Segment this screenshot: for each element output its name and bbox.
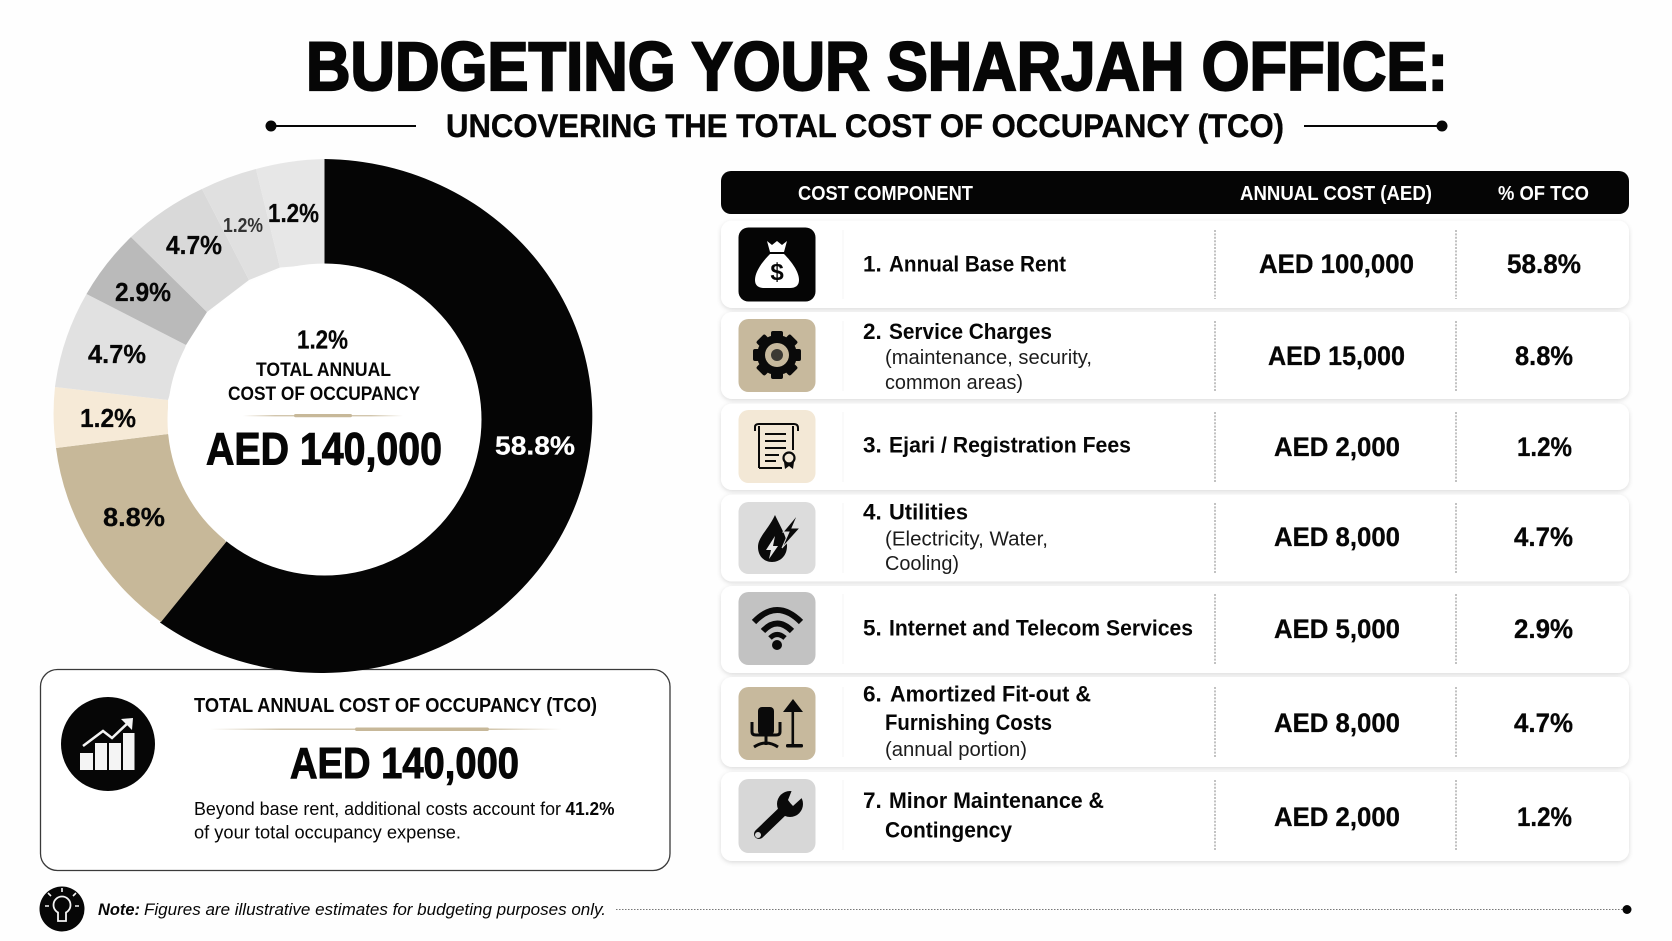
table row 2: service charges: Service Charges bbox=[889, 319, 1052, 344]
icon: wifi bbox=[738, 592, 816, 665]
table row 2: service charges: AED 15,000 bbox=[1268, 341, 1405, 371]
box heading: TOTAL ANNUAL COST OF OCCUPANCY (TCO) bbox=[194, 695, 597, 717]
table row 1: annual base rent: Annual Base Rent bbox=[889, 252, 1066, 276]
panel: TCO summary box bbox=[40, 670, 670, 870]
table row 2: service charges: (maintenance, security, bbox=[885, 346, 1092, 369]
table header bbox=[721, 171, 1629, 214]
donut centre text: AED 140,000 bbox=[206, 424, 442, 474]
table row 5: internet and telecom: AED 5,000 bbox=[1274, 614, 1400, 644]
footnote: Note: bbox=[98, 900, 140, 919]
footnote: Figures are illustrative estimates for budgeting purposes only. bbox=[144, 900, 606, 919]
table row 4: utilities: 4. bbox=[863, 500, 882, 524]
slice labels bbox=[80, 198, 575, 532]
table row 3: ejari registration fees: AED 2,000 bbox=[1274, 432, 1400, 462]
donut centre text: TOTAL ANNUAL bbox=[256, 360, 391, 381]
icon: money bag bbox=[738, 228, 816, 302]
slice labels: 4.7% bbox=[88, 339, 146, 369]
box explanation bbox=[194, 799, 614, 842]
box explanation: of your total occupancy expense. bbox=[194, 822, 461, 842]
table row 2: service charges: 2. bbox=[863, 319, 882, 344]
icon: certificate document bbox=[738, 410, 816, 483]
table row 4: utilities bbox=[721, 494, 1629, 582]
table row 7: minor maintenance: AED 2,000 bbox=[1274, 802, 1400, 832]
table row 4: utilities: (Electricity, Water, bbox=[885, 528, 1048, 550]
table row 3: ejari registration fees: 3. bbox=[863, 432, 882, 458]
table row 3: ejari registration fees bbox=[721, 404, 1629, 490]
slice labels: 1.2% bbox=[268, 198, 319, 228]
icon: wrench bbox=[738, 779, 816, 853]
table row 7: minor maintenance: 7. bbox=[863, 788, 882, 813]
slice labels: 58.8% bbox=[495, 430, 575, 460]
table row 2: service charges: common areas) bbox=[885, 371, 1023, 394]
table row 6: fit-out and furnishing: Furnishing Costs bbox=[885, 710, 1052, 735]
subtitle with rules: UNCOVERING THE TOTAL COST OF OCCUPANCY (TCO) bbox=[446, 108, 1284, 144]
table row 1: annual base rent: 1. bbox=[863, 252, 882, 276]
table row 7: minor maintenance: Minor Maintenance & bbox=[889, 788, 1104, 813]
table row 3: ejari registration fees: Ejari / Registration Fees bbox=[889, 432, 1131, 458]
table row 6: fit-out and furnishing: AED 8,000 bbox=[1274, 708, 1400, 738]
table row 7: minor maintenance: Contingency bbox=[885, 818, 1012, 842]
table row 6: fit-out and furnishing: Amortized Fit-out & bbox=[890, 682, 1091, 706]
donut chart bbox=[54, 159, 592, 673]
table row 7: minor maintenance: 1.2% bbox=[1517, 802, 1572, 832]
donut centre text: 1.2% bbox=[297, 324, 348, 354]
donut centre text: COST OF OCCUPANCY bbox=[228, 384, 420, 405]
title: BUDGETING YOUR SHARJAH OFFICE: bbox=[306, 28, 1448, 105]
table row 4: utilities: 4.7% bbox=[1514, 522, 1573, 552]
icon: office chair and lamp bbox=[738, 687, 816, 760]
slice labels: 4.7% bbox=[166, 230, 222, 260]
table row 1: annual base rent: 58.8% bbox=[1507, 249, 1581, 279]
footnote bbox=[40, 886, 1632, 932]
table row 7: minor maintenance bbox=[721, 772, 1629, 861]
slice labels: 1.2% bbox=[223, 215, 263, 237]
icon: money bag: $ bbox=[770, 259, 784, 286]
table row 6: fit-out and furnishing bbox=[721, 677, 1629, 767]
table row 2: service charges bbox=[721, 312, 1629, 399]
slice labels: 1.2% bbox=[80, 403, 136, 433]
table row 4: utilities: AED 8,000 bbox=[1274, 522, 1400, 552]
slice labels: 2.9% bbox=[115, 277, 171, 307]
table row 4: utilities: Utilities bbox=[889, 500, 968, 524]
table row 5: internet and telecom: 5. bbox=[863, 616, 882, 640]
table row 6: fit-out and furnishing: 4.7% bbox=[1514, 708, 1573, 738]
table row 5: internet and telecom: 2.9% bbox=[1514, 614, 1573, 644]
table header: ANNUAL COST (AED) bbox=[1240, 183, 1432, 205]
table row 5: internet and telecom bbox=[721, 586, 1629, 673]
icon: light bulb bbox=[40, 886, 84, 932]
table row 3: ejari registration fees: 1.2% bbox=[1517, 432, 1572, 462]
table row 2: service charges: 8.8% bbox=[1515, 341, 1573, 371]
icon: rising bar chart bbox=[61, 697, 155, 791]
table row 5: internet and telecom: Internet and Telecom Services bbox=[889, 616, 1193, 640]
icon: water drop and lightning bbox=[738, 502, 816, 574]
table row 6: fit-out and furnishing: (annual portion) bbox=[885, 738, 1027, 761]
table row 4: utilities: Cooling) bbox=[885, 552, 959, 575]
slice labels: 8.8% bbox=[103, 502, 165, 532]
table row 1: annual base rent: AED 100,000 bbox=[1259, 249, 1414, 279]
box explanation: Beyond base rent, additional costs account for bbox=[194, 799, 561, 819]
icon: gear bbox=[738, 319, 816, 392]
donut centre text bbox=[206, 324, 442, 474]
table header: COST COMPONENT bbox=[798, 183, 973, 205]
table row 6: fit-out and furnishing: 6. bbox=[863, 682, 882, 706]
box explanation: 41.2% bbox=[566, 799, 614, 819]
table header: % OF TCO bbox=[1498, 183, 1589, 205]
box total: AED 140,000 bbox=[290, 739, 519, 788]
table row 1: annual base rent bbox=[721, 220, 1629, 308]
